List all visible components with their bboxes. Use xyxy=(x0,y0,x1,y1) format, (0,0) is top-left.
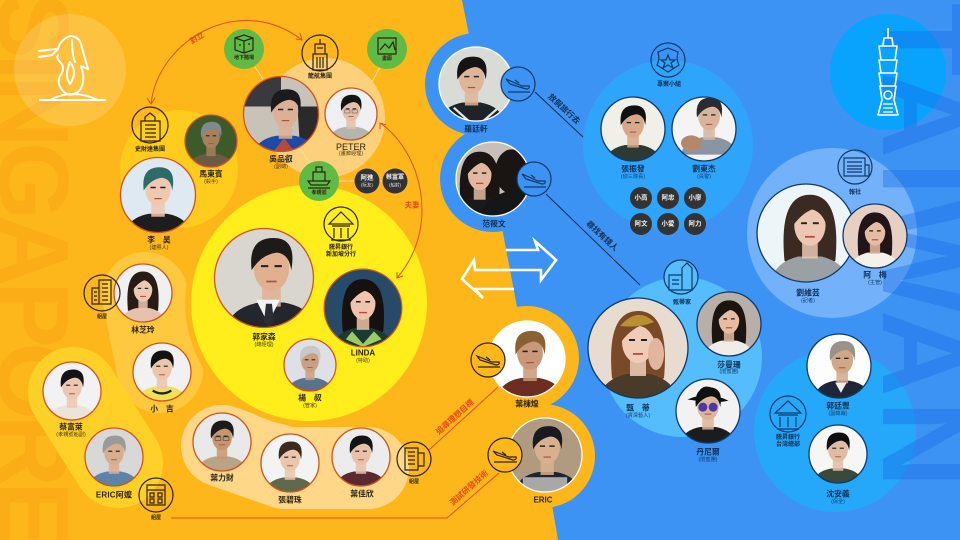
person: 沈安義: (保全) xyxy=(831,497,845,505)
person: 吳品叡: (副總) xyxy=(274,162,288,170)
icon: plane (羅廷軒) xyxy=(501,67,535,101)
person: 郭廷豐 xyxy=(807,334,871,417)
label: 夫妻: 夫妻 xyxy=(405,200,420,210)
arrow: two-way white arrows xyxy=(462,241,556,298)
person: 楊叔 xyxy=(284,339,336,409)
person: LINDA xyxy=(324,269,402,364)
blob: 史財達 group xyxy=(120,110,238,228)
panel: 甄蒂家 circle xyxy=(602,277,762,437)
person: 馬東賓: (殺手) xyxy=(204,177,218,185)
badge: 阿進: (阮友) xyxy=(361,182,373,188)
arrow: 對立 xyxy=(147,21,302,104)
icon: 報社 newspaper: 報社 xyxy=(849,188,861,196)
person: 李昊: (建照人) xyxy=(149,243,169,251)
panel: 專案小組 circle xyxy=(583,60,753,230)
icon: 騰昇銀行台灣總部: 騰昇銀行 xyxy=(776,433,800,441)
person: 阿梅: (主管) xyxy=(868,278,882,286)
icon: 組屋 (ERIC阿嬤) xyxy=(139,478,173,521)
blue ring behind traveller 范筱文 xyxy=(440,126,546,232)
badge: 蔡富軍 xyxy=(382,168,408,194)
person: 郭家森 xyxy=(214,228,317,348)
panel: 騰昇銀行新加坡分行 circle xyxy=(191,185,427,421)
panel: Taipei badge disc xyxy=(830,14,946,130)
person: 沈安義 xyxy=(809,425,867,505)
badge: 孝親號 xyxy=(299,161,339,201)
person: 劉維芸: 劉維芸 xyxy=(796,288,820,298)
icon: 龍航集團: 龍航集團 xyxy=(308,72,332,80)
team member chips: 小廖 xyxy=(688,192,702,202)
icon: 騰昇銀行新加坡分行: 騰昇銀行 xyxy=(329,243,353,251)
person: PETER: (畫廊經理) xyxy=(339,149,363,157)
person: 沈安義: 沈安義 xyxy=(826,488,850,498)
person: 甄蒂 xyxy=(588,298,688,419)
person: 阿梅 xyxy=(843,204,907,286)
icon: 騰昇銀行新加坡分行 xyxy=(324,207,358,258)
badge: 畫廊: 畫廊 xyxy=(382,55,392,62)
badge: 地下賭場: 地下賭場 xyxy=(234,54,254,61)
person: 羅廷軒: 羅廷軒 xyxy=(464,124,488,134)
label: 對立: 對立 xyxy=(188,30,206,46)
badge: 阿進 xyxy=(354,168,380,194)
person: 甄蒂: (資深藝人) xyxy=(626,411,650,419)
line: 追尋理想目標 xyxy=(429,387,498,450)
person: 阿梅: 阿 梅 xyxy=(863,270,887,280)
person: 張振發 xyxy=(601,97,665,180)
line: 尋找有錢人 xyxy=(546,194,640,285)
orange ring behind traveller 葉棟煌 xyxy=(475,306,579,410)
icon: 專案小組 police badge xyxy=(651,43,685,88)
person: LINDA: (特助) xyxy=(356,356,370,364)
icon: 組屋 (林芝玲) xyxy=(84,275,120,320)
label: 放假旅行去: 放假旅行去 xyxy=(546,91,582,126)
team member chips: 阿忠 xyxy=(662,192,675,202)
person: 蔡富萊 xyxy=(43,362,101,438)
person: 張振發: (偵三隊長) xyxy=(621,172,645,180)
person: 葉力財 xyxy=(193,413,251,482)
person: 莎曼珊 xyxy=(697,292,761,375)
person: 劉東杰: 劉東杰 xyxy=(692,164,716,174)
line: 放假旅行去 xyxy=(535,92,583,137)
person: ERIC: ERIC xyxy=(533,496,553,504)
team member chips xyxy=(630,187,706,235)
person: 劉維芸 xyxy=(757,184,855,304)
panel: 報社 circle xyxy=(747,148,917,318)
icon: 史財達集團 xyxy=(132,107,168,153)
person: 甄蒂: 甄 蒂 xyxy=(626,402,650,412)
line: 測試研發技術 xyxy=(171,473,499,518)
icon: 騰昇銀行台灣總部 xyxy=(770,396,806,448)
icon: 組屋 (ERIC阿嬤): 組屋 xyxy=(151,514,161,521)
label: 追尋理想目標: 追尋理想目標 xyxy=(433,397,476,436)
person: ERIC阿嬤 xyxy=(85,428,143,500)
person: 葉佳欣: 葉佳欣 xyxy=(350,488,374,498)
person: 張振發: 張振發 xyxy=(621,164,645,174)
person: PETER xyxy=(325,88,377,157)
blue ring behind traveller 羅廷軒 xyxy=(425,33,527,135)
team member chips: 阿力 xyxy=(688,218,702,228)
person: 蔡富萊: (孝親號船副) xyxy=(56,430,86,438)
icon: 史財達集團: 史財達集團 xyxy=(135,145,165,153)
badge: 孝親號: 孝親號 xyxy=(311,189,327,196)
icon: 龍航集團 xyxy=(302,35,338,80)
icon: 甄蒂家 house xyxy=(664,260,698,306)
person: 郭家森: (總經理) xyxy=(254,340,274,348)
person: 范筱文 xyxy=(450,142,530,228)
person: 丹尼爾: (閨蜜團) xyxy=(698,455,718,463)
blob: 葉力財 family xyxy=(222,446,368,468)
icon: plane (范筱文) xyxy=(517,162,551,196)
person: 林芝玲: 林芝玲 xyxy=(131,324,155,334)
badge: 畫廊 xyxy=(367,29,407,69)
person: 馬東賓: 馬東賓 xyxy=(199,168,223,178)
person: 丹尼爾: 丹尼爾 xyxy=(696,448,720,456)
team member chips: 阿文 xyxy=(634,218,648,228)
badge: 地下賭場 xyxy=(224,29,264,69)
blob: 林芝玲 and 小吉 xyxy=(145,295,160,370)
person: 丹尼爾 xyxy=(676,379,740,463)
person: 葉力財: 葉力財 xyxy=(210,472,234,482)
person: 郭廷豐: 郭廷豐 xyxy=(826,400,850,410)
background: Taiwan blue side xyxy=(462,0,960,540)
person: 馬東賓 xyxy=(185,115,237,185)
icon: 報社 newspaper xyxy=(838,150,872,196)
person: 劉東杰 xyxy=(672,97,737,180)
person: 李昊: 李 昊 xyxy=(147,234,171,244)
icon: 騰昇銀行新加坡分行: 新加坡分行 xyxy=(326,250,356,258)
person: 劉維芸: (記者) xyxy=(801,296,815,304)
person: 林芝玲 xyxy=(114,264,172,334)
person: ERIC阿嬤: ERIC阿嬤 xyxy=(96,490,132,500)
label: 測試研發技術: 測試研發技術 xyxy=(447,468,490,507)
person: 劉東杰: (員警) xyxy=(697,172,711,180)
person: 范筱文: 范筱文 xyxy=(482,218,506,228)
person: 楊叔: (管家) xyxy=(303,401,317,409)
person: 莎曼珊: (閨蜜團) xyxy=(719,367,739,375)
icon: 騰昇銀行台灣總部: 台灣總部 xyxy=(776,440,800,448)
badge: 蔡富軍: 蔡富軍 xyxy=(386,173,404,181)
icon: 組屋 (林芝玲): 組屋 xyxy=(97,313,107,320)
team member chips: 小高 xyxy=(634,192,648,202)
arrow: 夫妻 xyxy=(380,123,422,278)
connector lines from green badges xyxy=(255,67,383,181)
person: 葉棟煌 xyxy=(489,321,565,408)
person: 楊叔: 楊 叔 xyxy=(298,392,322,402)
icon: 組屋 (葉佳欣): 組屋 xyxy=(409,478,419,485)
blob: 龍航 group xyxy=(265,58,385,178)
icon: Merlion badge xyxy=(14,14,126,126)
person: 莎曼珊: 莎曼珊 xyxy=(717,360,741,370)
person: LINDA: LINDA xyxy=(351,348,375,358)
person: 葉棟煌: 葉棟煌 xyxy=(515,398,539,408)
person: 吳品叡 xyxy=(244,76,318,170)
person: 葉佳欣 xyxy=(332,428,390,498)
person: 郭廷豐: (副總裁) xyxy=(828,409,848,417)
person: 張碧珠: 張碧珠 xyxy=(278,494,302,504)
blob: 蔡富萊 and ERIC阿嬤 xyxy=(73,392,118,463)
person: 蔡富萊: 蔡富萊 xyxy=(59,422,83,432)
person: 小吉: 小 吉 xyxy=(150,404,174,414)
icon: 組屋 (葉佳欣) xyxy=(397,442,431,485)
team member chips: 小愛 xyxy=(662,218,675,228)
badge: 阿進: 阿進 xyxy=(360,172,374,182)
person: 吳品叡: 吳品叡 xyxy=(269,154,293,164)
icon: 專案小組 police badge: 專案小組 xyxy=(657,80,681,88)
person: 小吉 xyxy=(133,343,191,414)
badge: 蔡富軍: (船射) xyxy=(389,182,401,188)
person: PETER: PETER xyxy=(336,142,366,152)
icon: 甄蒂家 house: 甄蒂家 xyxy=(673,298,691,306)
halo around bank circle xyxy=(185,179,433,427)
panel: 騰昇銀行台灣總部 circle xyxy=(754,350,916,512)
icon: plane (ERIC) xyxy=(488,438,522,472)
icon: plane (葉棟煌) xyxy=(471,343,505,377)
person: 羅廷軒 xyxy=(439,47,513,134)
person: ERIC xyxy=(508,418,582,504)
label: 尋找有錢人: 尋找有錢人 xyxy=(584,218,620,253)
orange ring behind traveller ERIC xyxy=(491,404,595,508)
icon: Taipei 101 xyxy=(878,28,898,115)
person: 張碧珠 xyxy=(261,434,319,504)
person: 郭家森: 郭家森 xyxy=(252,332,276,342)
person: 李昊 xyxy=(120,158,196,251)
